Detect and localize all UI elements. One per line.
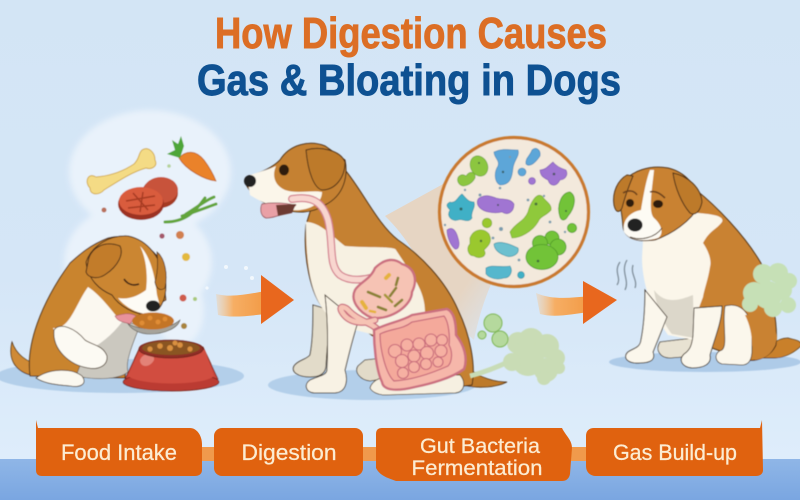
title bbox=[197, 9, 621, 105]
step 2: dog digestion diagram bbox=[244, 143, 507, 400]
white chest and belly bbox=[306, 222, 425, 335]
esophagus bbox=[292, 198, 378, 280]
connectors bbox=[198, 447, 594, 461]
dog white chest bbox=[53, 287, 122, 352]
intestine tube inner bbox=[341, 307, 380, 332]
dog ear right bbox=[155, 252, 166, 290]
dog ears bbox=[614, 173, 702, 214]
bacteria: cyan bbox=[447, 194, 524, 279]
dog tongue bbox=[115, 314, 136, 324]
dog ear bbox=[306, 148, 345, 190]
step 1: dog eating with food cloud bbox=[0, 110, 244, 393]
process flow bbox=[36, 420, 763, 481]
arrow 2 bbox=[536, 281, 617, 324]
step 2: beige zoom cone to bacteria bbox=[385, 183, 492, 340]
ground shadow bbox=[609, 352, 800, 372]
dog ear left bbox=[86, 244, 121, 278]
front leg right bbox=[681, 306, 722, 368]
bacteria: blue bbox=[494, 148, 540, 185]
far hind foot bbox=[357, 358, 388, 381]
intestines inner bbox=[380, 316, 452, 381]
dog tail bbox=[11, 342, 40, 376]
dog head bbox=[619, 167, 700, 241]
thought cloud bbox=[64, 110, 231, 346]
dog head bbox=[245, 143, 346, 212]
icon: steak bbox=[118, 177, 178, 220]
bacteria magnifier bbox=[440, 138, 588, 286]
icon: carrot bbox=[167, 136, 216, 181]
title line 2: Gas & Bloating in Dogs bbox=[197, 56, 621, 105]
dog hind foot bbox=[36, 370, 84, 387]
dog muzzle bbox=[247, 166, 322, 210]
spoon with kibble bbox=[128, 312, 180, 334]
step: gut bacteria fermentation: Fermentation bbox=[412, 457, 542, 480]
bacteria: green pair bbox=[458, 153, 491, 186]
hind orange patch bbox=[745, 315, 777, 360]
dog eyes and nose bbox=[623, 191, 665, 239]
step: digestion: Digestion bbox=[242, 440, 336, 465]
dog blaze and muzzle bbox=[624, 170, 661, 240]
stomach contents bbox=[362, 275, 402, 312]
near front leg bbox=[306, 295, 358, 393]
bacteria nuclei bbox=[460, 162, 567, 262]
ground shadow bbox=[0, 359, 244, 393]
dog muzzle and blaze bbox=[118, 246, 160, 314]
intestines outer wall bbox=[374, 309, 466, 390]
bottom blue band bbox=[0, 459, 800, 500]
arrow 1 bbox=[205, 265, 294, 324]
far front leg bbox=[293, 305, 330, 377]
gas bubbles bbox=[478, 314, 508, 347]
stomach bbox=[354, 260, 415, 318]
gas cloud from dog bbox=[470, 314, 565, 385]
step: gas build-up bbox=[586, 420, 763, 476]
front leg left bbox=[626, 290, 667, 363]
dog body bbox=[305, 170, 473, 392]
bacteria: lime bbox=[468, 195, 551, 258]
step: gut bacteria fermentation: Gut Bacteria bbox=[420, 435, 540, 458]
dog tail bbox=[763, 338, 800, 358]
step: food intake: Food Intake bbox=[61, 440, 177, 465]
bloat wiggle lines bbox=[617, 260, 636, 290]
step 3: bloated dog with gas bbox=[609, 167, 800, 372]
ground shadow bbox=[268, 370, 476, 400]
step: gas build-up: Gas Build-up bbox=[613, 440, 737, 465]
title line 1: How Digestion Causes bbox=[215, 9, 607, 58]
dog body bbox=[29, 237, 166, 378]
far front foot bbox=[658, 338, 696, 358]
dog eye and nose bbox=[124, 279, 160, 312]
gas cloud bbox=[742, 263, 797, 317]
step: food intake bbox=[36, 420, 202, 476]
dog grey chest bbox=[76, 318, 140, 379]
bacteria specks bbox=[444, 156, 566, 261]
dog bowl bbox=[123, 340, 219, 391]
dog tail bbox=[466, 368, 507, 387]
dog body bbox=[650, 190, 776, 360]
dog front leg bbox=[54, 326, 107, 368]
dog eye and nose bbox=[244, 164, 289, 187]
chest grey belly bbox=[654, 290, 694, 338]
bacteria: purple bbox=[447, 162, 567, 249]
intestine folds bbox=[388, 334, 448, 378]
icon: bone bbox=[87, 149, 156, 194]
dog tongue and mouth bbox=[261, 203, 296, 218]
hind haunch bbox=[716, 305, 752, 365]
icon: green onion bbox=[165, 197, 216, 222]
small intestine tube bbox=[341, 307, 380, 332]
step: digestion bbox=[214, 428, 363, 476]
dog head bbox=[86, 236, 166, 314]
hind foot bbox=[370, 375, 464, 395]
dog chest bbox=[642, 213, 722, 340]
step: gut bacteria fermentation bbox=[376, 428, 572, 481]
food crumbs bbox=[102, 164, 197, 329]
esophagus inner bbox=[292, 198, 378, 280]
bacteria: green cluster bbox=[526, 192, 577, 270]
